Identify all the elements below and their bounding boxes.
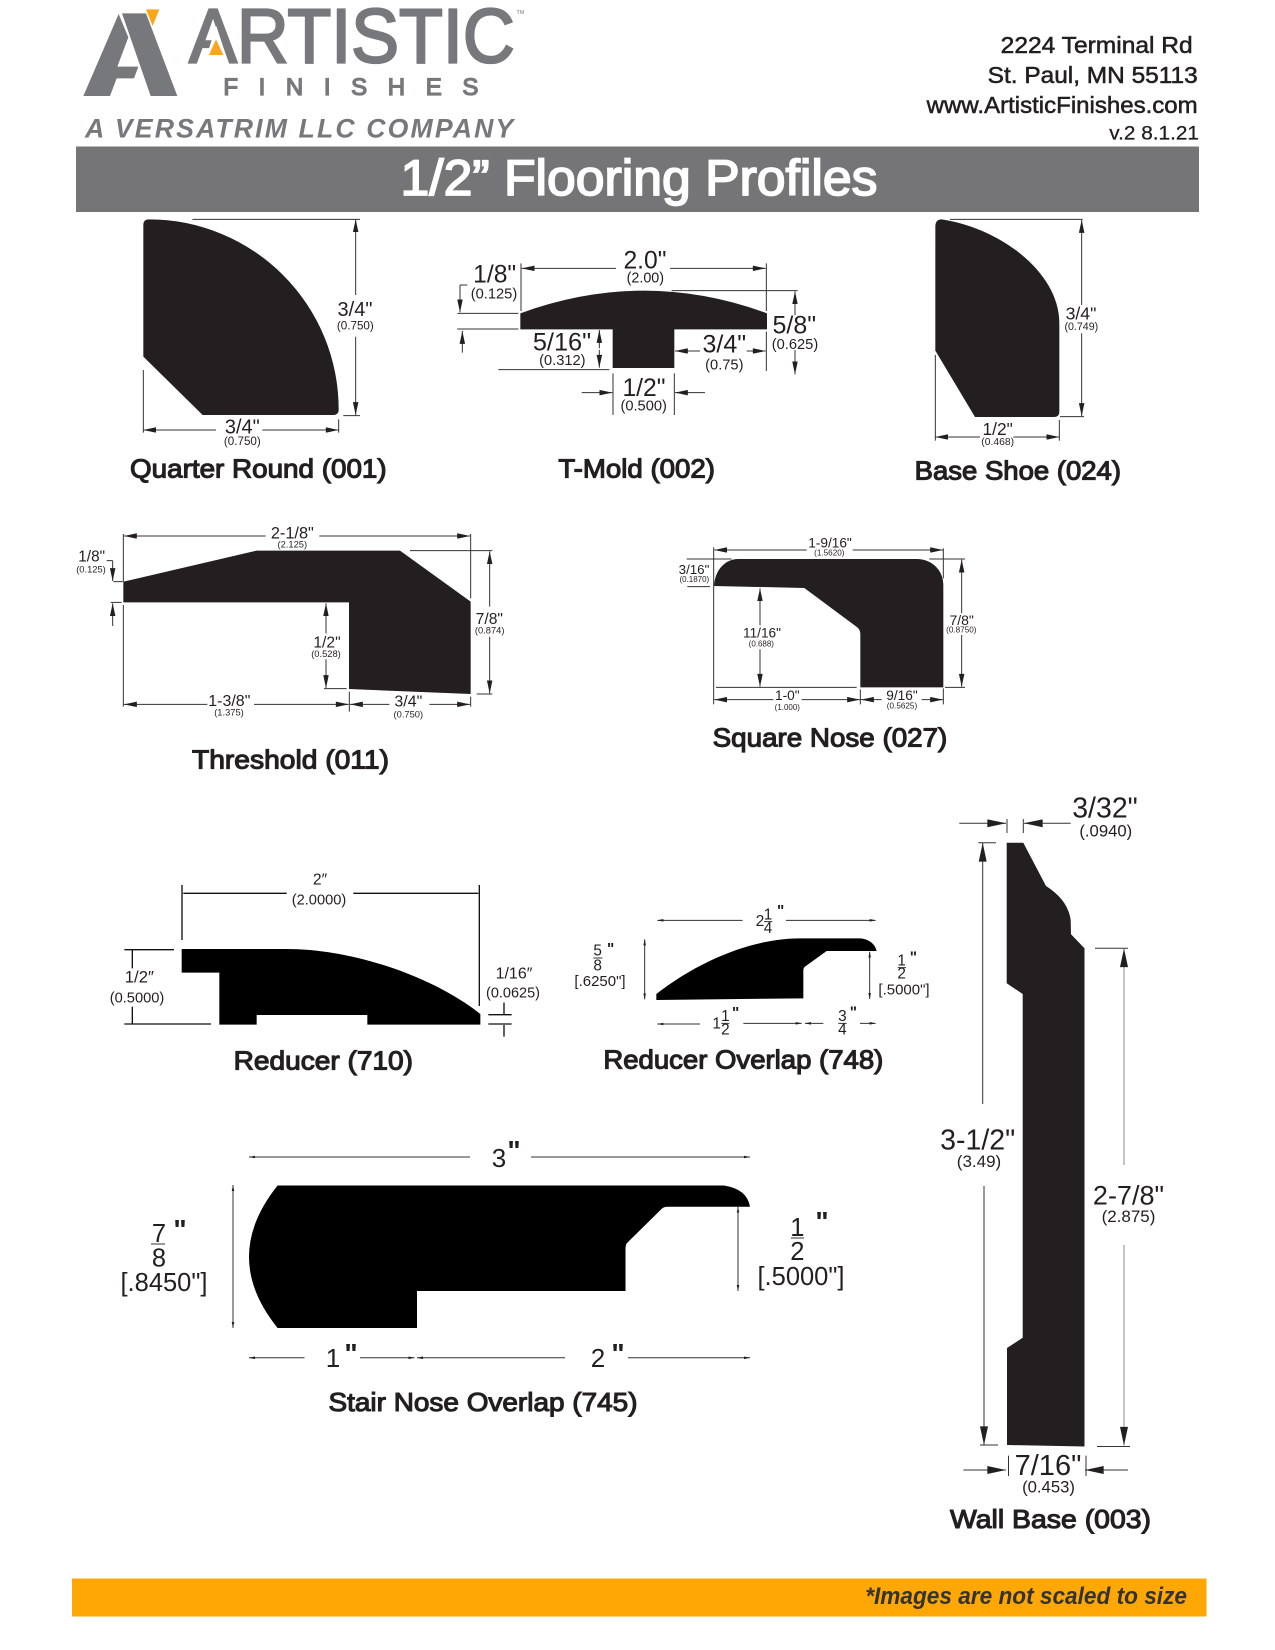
dimensions <box>143 219 374 448</box>
dimensions: 8 <box>152 1244 166 1272</box>
panel: T-Mold <box>457 247 818 483</box>
dimensions: 4 <box>764 920 773 937</box>
dimensions: (1.5620) <box>814 549 845 558</box>
dimensions: (3.49) <box>957 1152 1001 1171</box>
label: Reducer (710) <box>234 1045 413 1075</box>
dimensions: 8 <box>593 957 602 974</box>
dimensions: 3/4" <box>394 694 422 711</box>
contact address block: v.2 8.1.21 <box>1109 124 1199 144</box>
panel: Square Nose <box>679 535 977 753</box>
dimensions: (0.312) <box>539 353 586 369</box>
dimensions: (0.874) <box>475 625 504 635</box>
footer note bar: *Images are not scaled to size <box>865 1583 1187 1610</box>
profile shape <box>143 219 339 415</box>
label: Base Shoe (024) <box>915 455 1121 485</box>
dimensions: 2 <box>790 1238 804 1266</box>
title banner: 1/2” Flooring Profiles <box>400 150 878 206</box>
dimensions: (0.688) <box>749 640 774 649</box>
dimensions: 3-1/2" <box>940 1124 1015 1156</box>
dimensions: (2.0000) <box>292 892 346 908</box>
dimensions: " <box>732 1005 739 1022</box>
dimensions <box>940 792 1164 1497</box>
dimensions: 1 <box>897 952 906 969</box>
dimensions: (0.125) <box>76 564 106 574</box>
dimensions: " <box>910 949 917 966</box>
dimensions: " <box>850 1004 857 1021</box>
dimensions: " <box>507 1135 521 1166</box>
dimensions: (1.375) <box>214 708 244 718</box>
dimensions: 1-9/16" <box>808 535 852 550</box>
dimensions: 1 <box>712 1015 721 1032</box>
panel: Wall Base <box>940 792 1164 1534</box>
dimensions: " <box>607 941 614 958</box>
contact address block: www.ArtisticFinishes.com <box>926 92 1198 118</box>
dimensions: 2 <box>897 966 906 983</box>
dimensions: 1 <box>764 906 772 923</box>
contact address block: St. Paul, MN 55113 <box>988 62 1198 88</box>
dimensions: (1.000) <box>775 703 800 712</box>
dimensions: 3 <box>492 1143 506 1173</box>
dimensions: (0.125) <box>471 286 517 302</box>
dimensions: (0.75) <box>705 357 743 373</box>
icon: stylised A mark <box>83 9 177 96</box>
dimensions: 1/2″ <box>125 968 154 987</box>
label: Square Nose (027) <box>713 723 947 753</box>
dimensions: 3/4" <box>225 416 260 438</box>
dimensions: 1 <box>326 1343 340 1373</box>
dimensions: 3/16" <box>679 562 710 577</box>
dimensions: " <box>815 1206 829 1237</box>
dimensions: (0.453) <box>1022 1478 1075 1497</box>
dimensions <box>679 535 977 712</box>
dimensions: (2.875) <box>1102 1207 1155 1226</box>
logo: Artistic Finishes <box>83 0 524 143</box>
dimensions: 1/2" <box>983 419 1013 439</box>
dimensions: 7/8" <box>949 612 974 628</box>
dimensions: (0.8750) <box>946 626 977 635</box>
dimensions: 11/16" <box>743 625 781 640</box>
dimensions: 2.0" <box>623 247 667 274</box>
profile shape <box>656 938 877 1000</box>
panel: Threshold <box>76 524 504 775</box>
dimensions <box>457 247 818 415</box>
dimensions: 5 <box>593 943 602 960</box>
dimensions: 1/2" <box>622 375 666 402</box>
label: Reducer Overlap (748) <box>603 1044 883 1074</box>
panel: Reducer <box>110 871 540 1075</box>
dimensions: 1/8" <box>473 261 516 288</box>
dimensions: (0.5625) <box>887 702 917 711</box>
dimensions <box>120 1135 845 1373</box>
dimensions: (2.00) <box>627 271 664 287</box>
dimensions: 2″ <box>313 871 328 888</box>
dimensions: 1 <box>721 1008 730 1025</box>
label: Quarter Round (001) <box>130 454 387 484</box>
dimensions <box>110 871 540 1037</box>
dimensions: [.6250"] <box>574 973 626 990</box>
panel: Quarter Round <box>130 219 387 484</box>
panel: Reducer Overlap <box>574 903 930 1074</box>
dimensions: " <box>344 1338 358 1369</box>
dimensions: 3/4" <box>1066 303 1096 323</box>
dimensions: (0.1870) <box>679 575 710 584</box>
dimensions: 2-1/8" <box>271 524 314 542</box>
dimensions: 7/16" <box>1015 1450 1081 1482</box>
panel: Stair Nose Overlap <box>120 1135 845 1417</box>
panel: Base Shoe <box>915 219 1121 485</box>
dimensions: " <box>611 1338 625 1369</box>
profile shape <box>935 219 1059 417</box>
profile shape <box>123 551 471 694</box>
dimensions: [.8450"] <box>120 1269 208 1297</box>
dimensions: [.5000"] <box>878 982 930 999</box>
dimensions: (.0940) <box>1079 822 1132 841</box>
dimensions: 9/16" <box>886 688 918 703</box>
wordmark: FINISHES: FINISHES <box>223 74 478 101</box>
dimensions: (0.5000) <box>110 991 164 1007</box>
dimensions: 2 <box>591 1343 605 1373</box>
dimensions: 1-0" <box>775 688 800 703</box>
dimensions: " <box>173 1214 187 1245</box>
dimensions: 2-7/8" <box>1093 1181 1164 1211</box>
dimensions: 2 <box>721 1021 730 1038</box>
dimensions: (0.468) <box>981 437 1014 448</box>
profile shape <box>714 559 943 687</box>
dimensions <box>935 219 1098 448</box>
dimensions: 3/4" <box>703 331 746 359</box>
dimensions: 2 <box>756 913 764 930</box>
dimensions: 3/32" <box>1072 792 1138 824</box>
dimensions: 1 <box>790 1214 804 1242</box>
dimensions: 5/16" <box>533 329 591 357</box>
dimensions: 7/8" <box>476 611 503 628</box>
dimensions: [.5000"] <box>757 1263 845 1291</box>
wordmark: ARTISTIC: TM <box>516 10 524 16</box>
dimensions: (0.750) <box>224 435 261 448</box>
dimensions: " <box>777 903 784 920</box>
dimensions: (0.749) <box>1064 321 1098 333</box>
dimensions <box>574 903 930 1038</box>
contact address block: 2224 Terminal Rd <box>1001 32 1193 58</box>
profile shape <box>182 949 480 1025</box>
profile shape <box>520 291 767 368</box>
profile shape <box>249 1186 750 1328</box>
dimensions: (0.625) <box>772 337 818 353</box>
dimensions: 1/8" <box>78 549 105 566</box>
dimensions: (0.0625) <box>486 985 540 1001</box>
dimensions: 5/8" <box>773 311 816 339</box>
label: Stair Nose Overlap (745) <box>328 1387 638 1417</box>
dimensions <box>76 524 504 719</box>
dimensions: (0.528) <box>311 649 341 659</box>
dimensions: 3/4" <box>338 299 372 321</box>
label: Threshold (011) <box>192 745 389 775</box>
dimensions: 1/16″ <box>496 965 533 982</box>
dimensions: (2.125) <box>278 539 307 549</box>
dimensions: (0.500) <box>620 399 667 415</box>
dimensions: (0.750) <box>337 319 374 332</box>
label: Wall Base (003) <box>950 1504 1151 1534</box>
footer note bar <box>72 1578 1206 1616</box>
label: T-Mold (002) <box>558 453 715 483</box>
dimensions: 7 <box>152 1220 166 1248</box>
profile shape <box>1007 843 1084 1446</box>
dimensions: 1/2" <box>313 635 341 652</box>
dimensions: 4 <box>838 1021 847 1038</box>
contact address block <box>926 32 1199 144</box>
tagline: A VERSATRIM LLC COMPANY <box>84 113 516 143</box>
dimensions: 1-3/8" <box>208 693 250 710</box>
dimensions: 3 <box>838 1008 847 1025</box>
title banner <box>76 146 1199 212</box>
dimensions: (0.750) <box>394 709 423 719</box>
